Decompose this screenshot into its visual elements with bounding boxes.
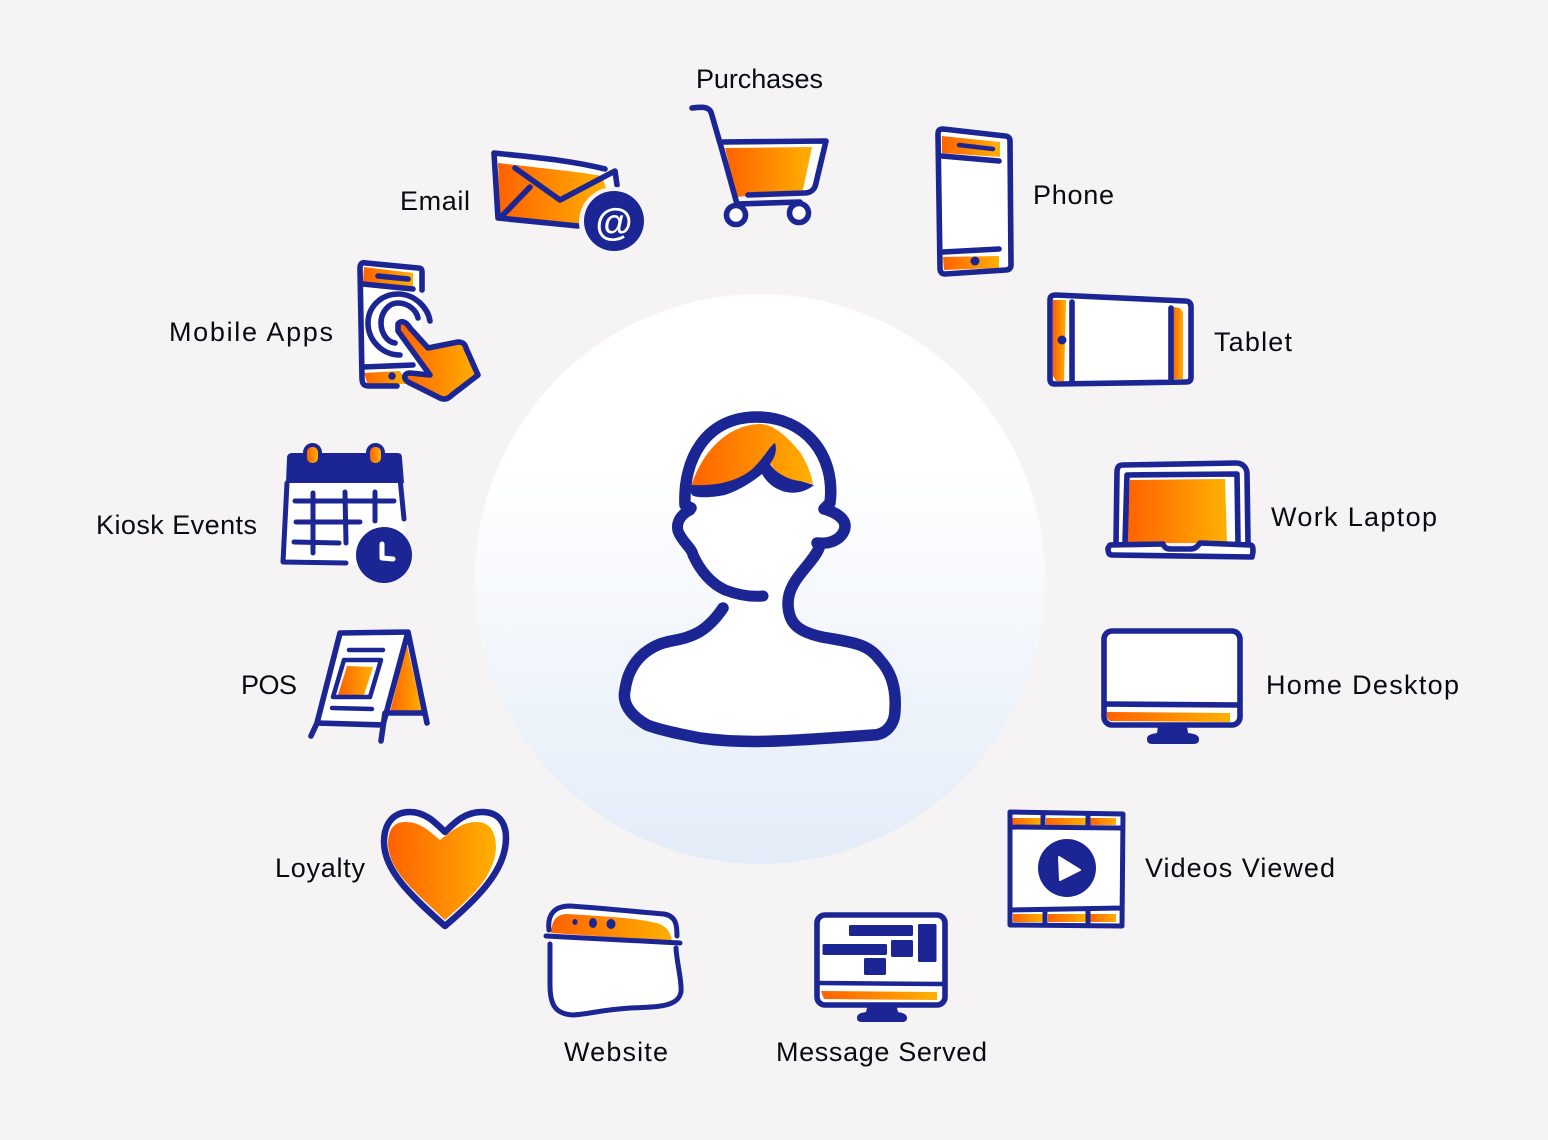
icon: video player [1009, 812, 1123, 926]
icon: monitor with message blocks [817, 915, 945, 1022]
label: Mobile Apps: Mobile Apps [169, 317, 333, 347]
label: Phone: Phone [1033, 180, 1114, 210]
icon: sandwich board sign [311, 632, 427, 741]
icon: heart [384, 812, 506, 926]
hair fringe [690, 443, 814, 497]
icon: mobile app touch [360, 263, 478, 399]
label: Loyalty: Loyalty [275, 853, 366, 883]
icon: calendar with clock [283, 443, 412, 583]
label: Purchases: Purchases [696, 64, 823, 94]
label: Message Served: Message Served [776, 1037, 987, 1067]
label: Kiosk Events: Kiosk Events [96, 510, 257, 540]
label: Email: Email [400, 186, 470, 216]
icon: phone [938, 129, 1011, 274]
face outline [678, 510, 763, 596]
head and shoulders outline [624, 417, 895, 741]
icon: shopping cart [692, 107, 827, 224]
label: Tablet: Tablet [1214, 327, 1292, 357]
central gradient circle [475, 294, 1045, 864]
icon: person silhouette [624, 417, 895, 742]
at sign: @ [595, 202, 633, 244]
label: Work Laptop: Work Laptop [1271, 502, 1437, 532]
label: Website: Website [564, 1037, 668, 1067]
hair [690, 424, 813, 490]
calendar rings [307, 447, 381, 463]
label: POS: POS [241, 670, 297, 700]
icon: tablet [1050, 295, 1191, 384]
icon: browser window [546, 906, 681, 1015]
label: Home Desktop: Home Desktop [1266, 670, 1459, 700]
icon: laptop [1108, 463, 1253, 557]
icon: home desktop [1104, 631, 1240, 744]
label: Videos Viewed: Videos Viewed [1145, 853, 1335, 883]
icon: envelope with at sign [494, 153, 649, 257]
